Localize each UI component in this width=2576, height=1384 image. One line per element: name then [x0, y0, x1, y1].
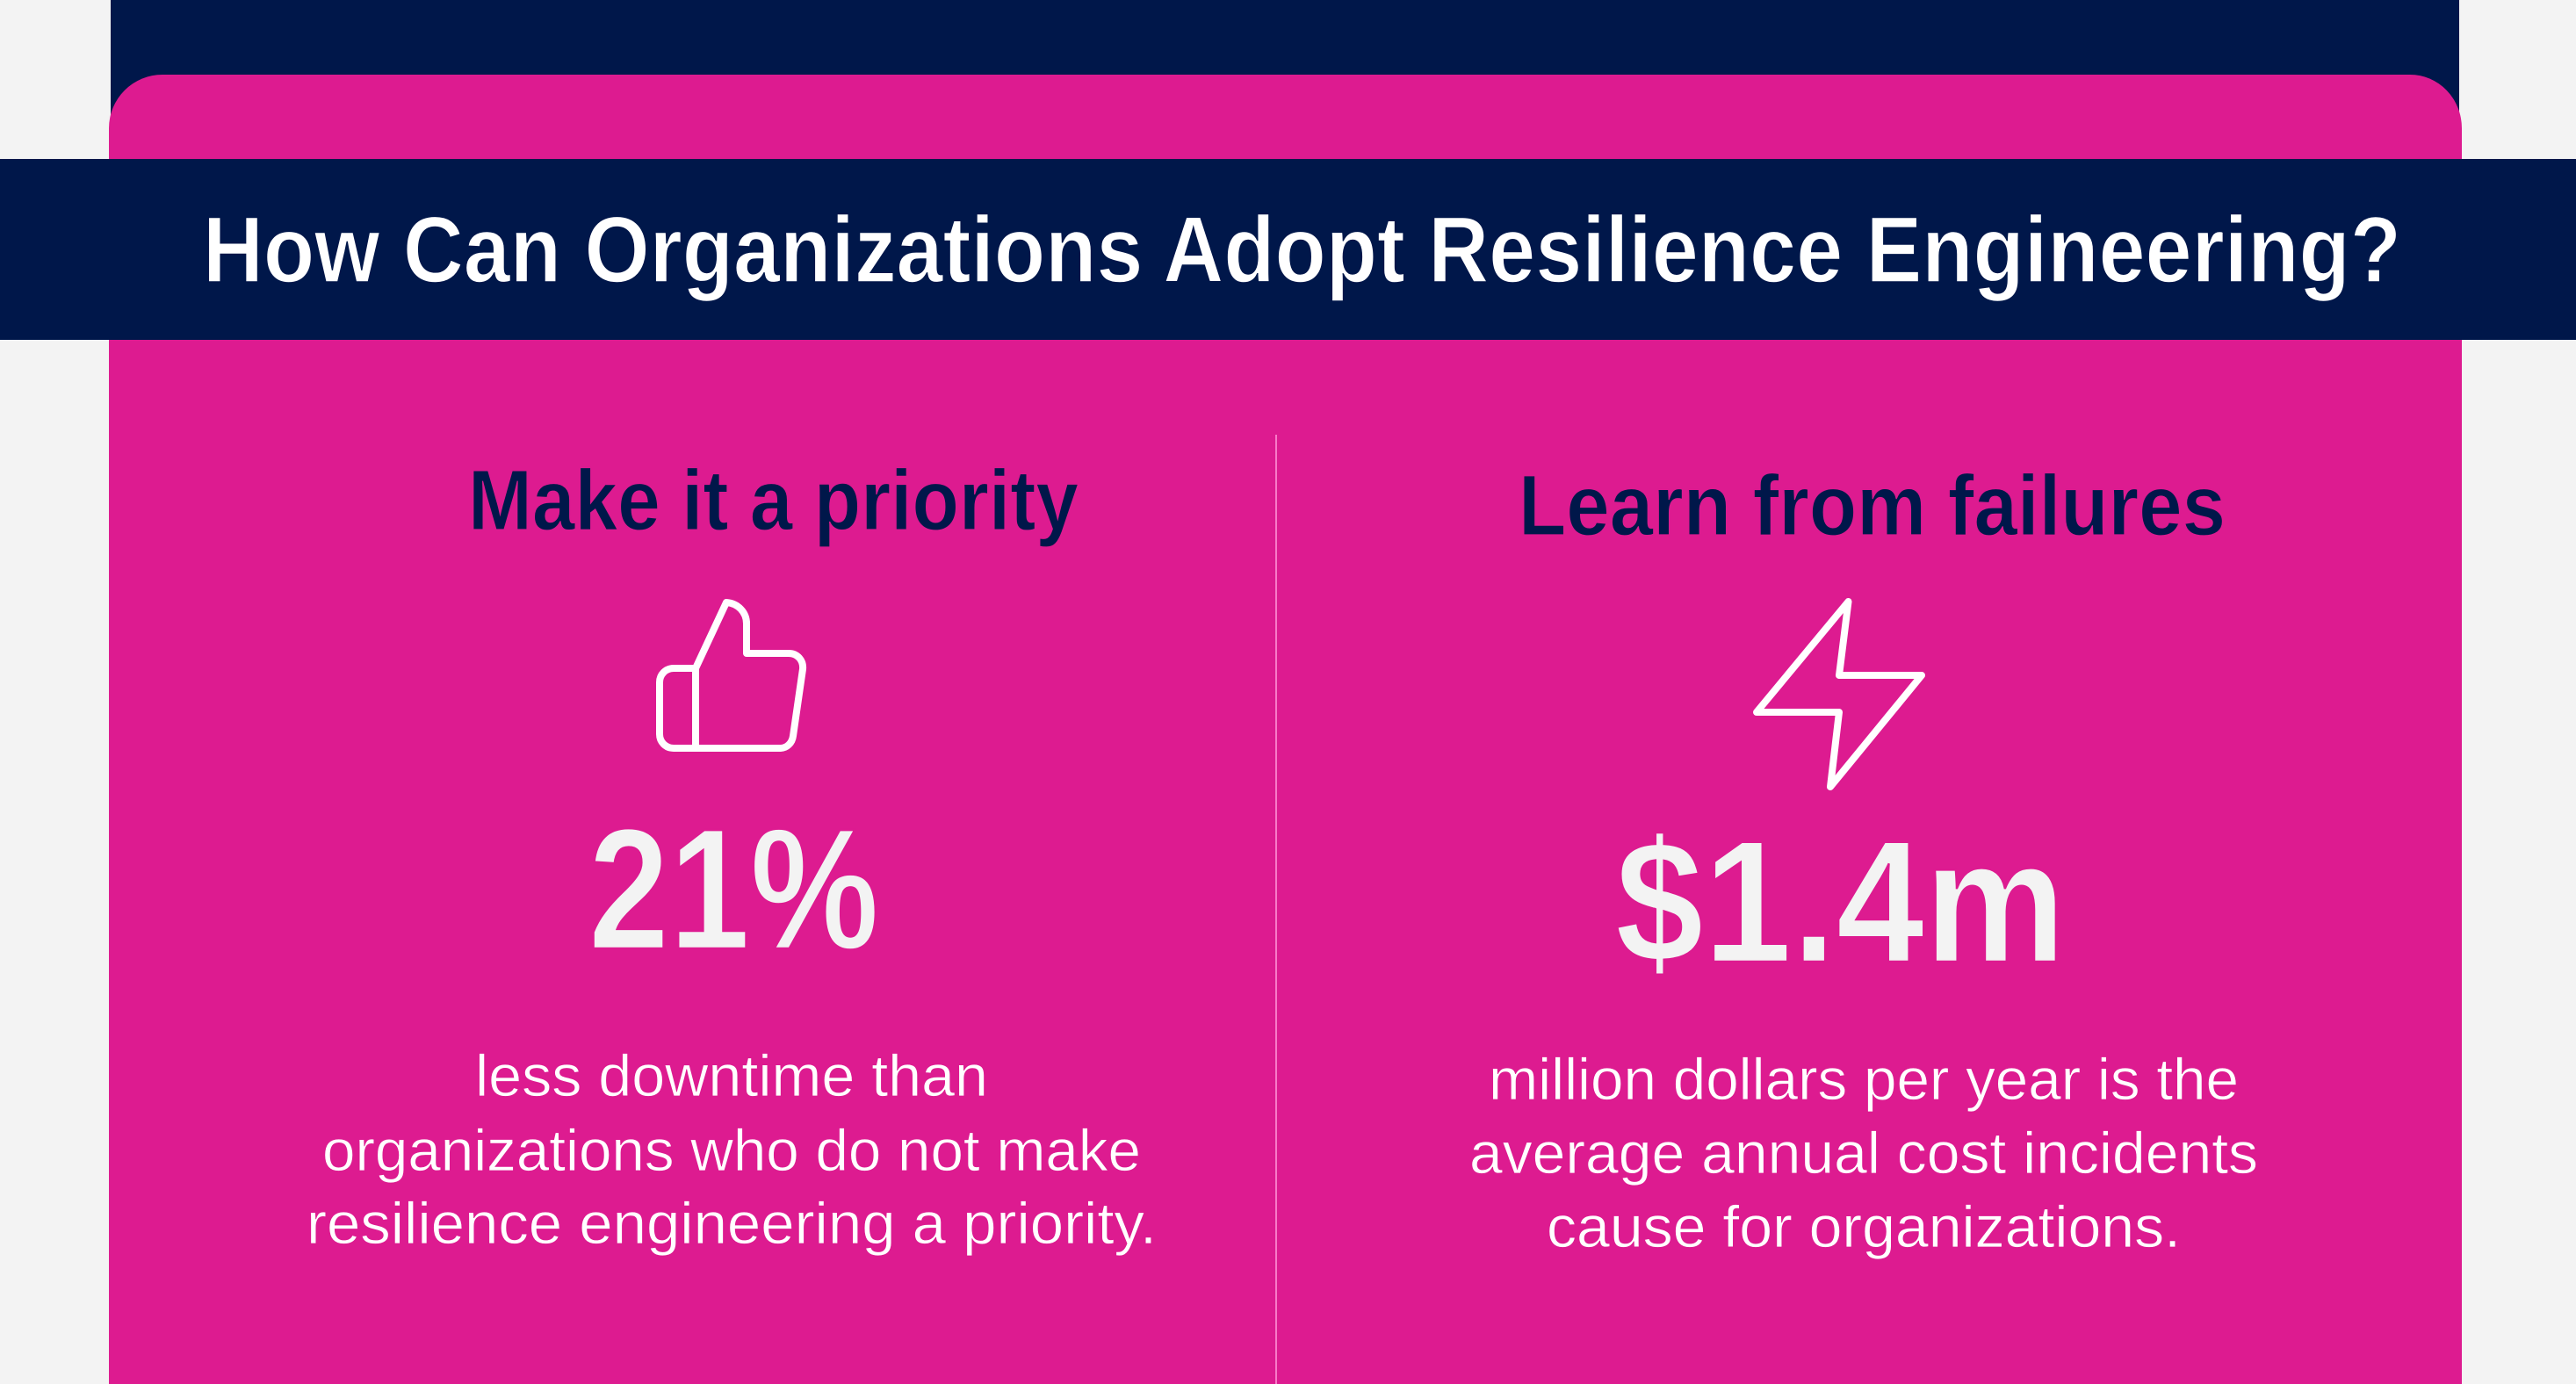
- body text: million dollars: average annual cost incidents: [1469, 1121, 2258, 1186]
- statistic: $1.4m: $1.4m: [1615, 804, 2066, 998]
- panel: learn from failures: [1469, 458, 2258, 1260]
- divider: [1275, 435, 1277, 1384]
- icon: lightning bolt: [1757, 602, 1922, 787]
- body text: less downtime: resilience engineering a priority.: [307, 1191, 1157, 1257]
- body text: million dollars: million dollars per year is the: [1489, 1047, 2239, 1113]
- body text: less downtime: [307, 1043, 1157, 1257]
- heading: make it a priority: Make it a priority: [468, 452, 1079, 548]
- body text: million dollars: [1469, 1047, 2258, 1260]
- panel: make it a priority: [307, 452, 1157, 1257]
- navy top block: [111, 0, 2459, 176]
- body text: million dollars: cause for organizations.: [1547, 1194, 2181, 1260]
- statistic: 21%: 21%: [588, 793, 879, 985]
- icon: thumbs up: [660, 602, 803, 748]
- body text: less downtime: organizations who do not make: [322, 1118, 1141, 1184]
- heading: learn from failures: Learn from failures: [1519, 458, 2226, 553]
- title band: [0, 159, 2576, 340]
- body text: less downtime: less downtime than: [475, 1043, 988, 1109]
